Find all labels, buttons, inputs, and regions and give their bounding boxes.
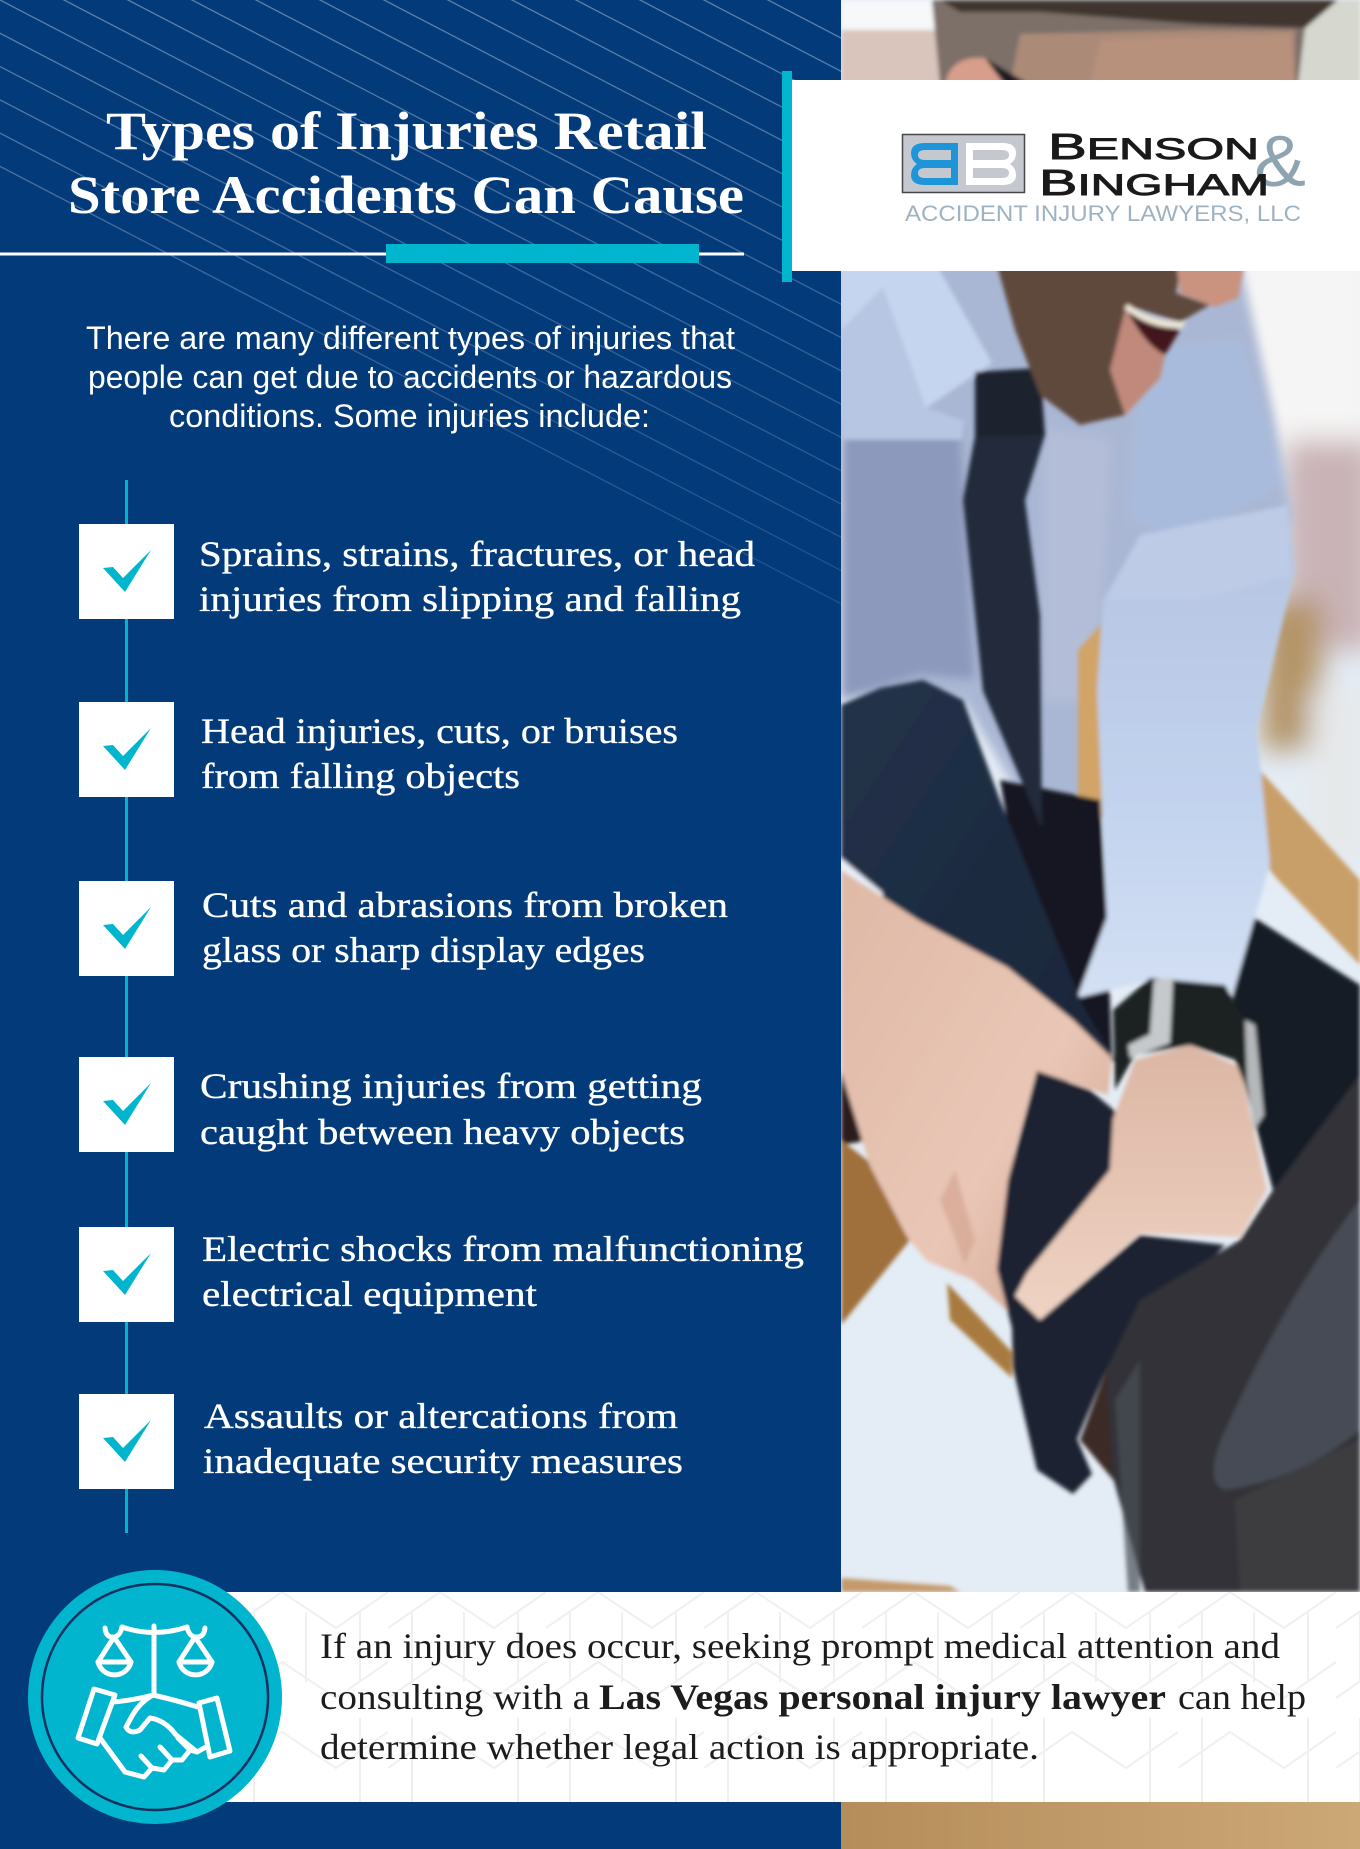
head and hair [930,0,1307,80]
checklist item 5 [79,1227,804,1322]
wood floor strip under the callout [841,1802,1360,1849]
checklist item 6: Assaults or altercations from [204,1396,678,1436]
logo wordmark: & [1254,122,1306,202]
left hand [841,870,1112,1316]
checklist item 2: from falling objects [201,756,520,796]
panel: navy background [0,0,841,1849]
icon: scales of justice over handshake in teal circle [28,1570,282,1824]
callout text: consulting with a [320,1677,590,1717]
shirt cuff under hand [841,858,885,905]
callout text [320,1626,1306,1767]
background diagonal lines [0,0,841,604]
checklist item 5: electrical equipment [202,1274,537,1314]
logo panel [782,71,1360,282]
intro text [86,320,735,434]
callout text: can help [1178,1677,1306,1717]
callout text: Las Vegas personal injury lawyer [599,1677,1166,1717]
checklist item 3: Cuts and abrasions from broken [202,885,728,925]
watch strap [1110,976,1246,1092]
near trouser leg [841,680,1115,1090]
photo: injured man holding his leg [841,0,1360,1592]
mouth [1128,312,1180,355]
checklist item 1 [79,524,755,619]
shoe [1107,1075,1360,1592]
chin and lower lip [1110,310,1165,415]
beard [996,262,1210,425]
railing wood [1258,768,1360,965]
logo panel: B INGHAM [1039,162,1269,203]
checklist item 6: inadequate security measures [203,1441,683,1481]
checklist item 2: Head injuries, cuts, or bruises [201,711,678,751]
logo tagline: ACCIDENT INJURY LAWYERS, LLC [905,201,1301,226]
right hand [1015,1045,1267,1320]
checklist item 1: Sprains, strains, fractures, or head [199,534,755,574]
ear [945,58,1005,85]
tie [963,368,1045,829]
torso shirt [841,262,1292,830]
title underline with teal accent [0,244,744,263]
wood behind arm [1078,620,1105,820]
intro text: conditions. Some injuries include: [169,398,650,434]
checklist item 4 [79,1057,702,1152]
checklist item 4: Crushing injuries from getting [200,1066,702,1106]
title [68,101,744,225]
checklist item 1: injuries from slipping and falling [199,579,741,619]
title: Store Accidents Can Cause [68,165,744,225]
checklist item 3: glass or sharp display edges [202,930,645,970]
checklist vertical connector line [125,480,128,1533]
trouser fabric held by hands [997,1071,1225,1494]
logo panel: B ENSON [1048,126,1259,167]
intro text: people can get due to accidents or hazardous [88,359,732,395]
callout text: If an injury does occur, seeking prompt medical attention and [320,1626,1280,1666]
callout text: determine whether legal action is appropriate. [320,1727,1039,1767]
checklist item 4: caught between heavy objects [200,1112,685,1152]
checklist item 3 [79,881,728,976]
nose [1174,271,1246,309]
sock [1080,1368,1120,1482]
logo mark: BB monogram [902,134,1024,192]
checklist item 6 [79,1394,683,1489]
left wood and dark shadow [841,1071,865,1148]
collar [841,262,992,408]
callout band with lawyer message [220,1592,1360,1802]
sleeve [1077,505,1295,998]
intro text: There are many different types of injuries that [86,320,735,356]
title: Types of Injuries Retail [106,101,707,161]
checklist item 2 [79,702,678,797]
checklist item 5: Electric shocks from malfunctioning [202,1229,804,1269]
top background [841,0,938,30]
dark trousers behind [1000,780,1112,1060]
